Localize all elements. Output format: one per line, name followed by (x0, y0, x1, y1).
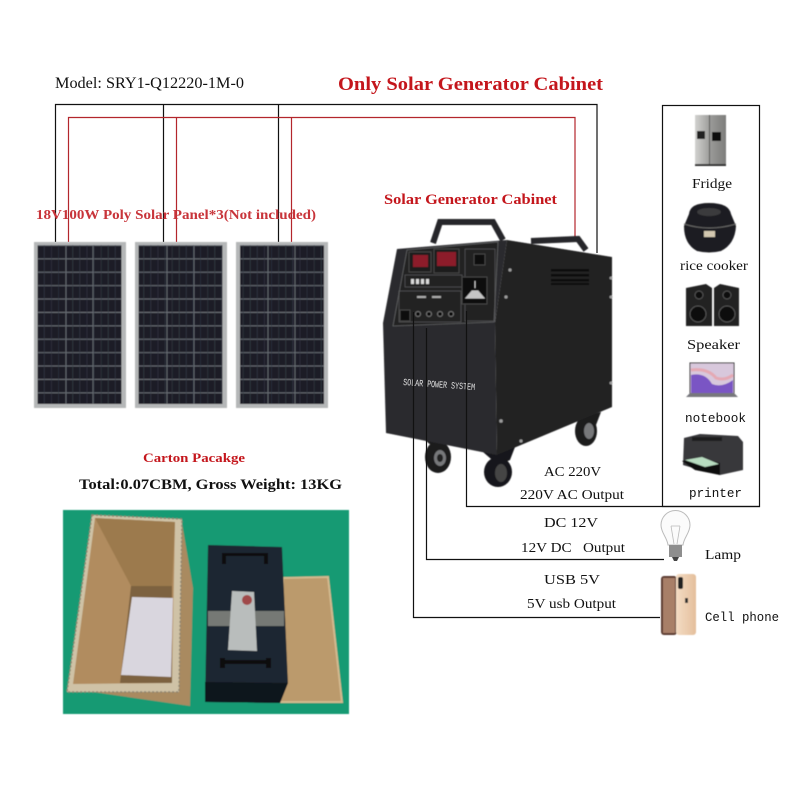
label: rice cooker: rice cooker (680, 259, 748, 274)
icon: rice cooker (684, 203, 736, 252)
label: printer: printer (689, 486, 742, 501)
panel 2 (135, 242, 227, 408)
solar generator cabinet (383, 222, 612, 487)
output label: DC: DC 12V (544, 516, 598, 531)
panel 1 (34, 242, 126, 408)
handles (433, 222, 586, 250)
indicator lights (411, 279, 429, 284)
icon: printer (682, 434, 743, 475)
icon: cell phone (661, 574, 696, 635)
carton photo (63, 510, 349, 714)
green floor (63, 510, 349, 714)
screws (499, 268, 612, 443)
output label: AC: AC 220V (544, 465, 601, 480)
output label: USB: 5V usb Output (527, 597, 616, 612)
label: fridge: Fridge (692, 177, 732, 192)
power switch (474, 254, 485, 265)
output label: AC: 220V AC Output (520, 488, 624, 503)
output label: USB (527, 573, 616, 612)
output label: DC: 12V DC Output (521, 541, 625, 556)
digital meters (409, 249, 459, 273)
icon: notebook (686, 363, 738, 397)
front face (383, 240, 507, 455)
label: cell phone: Cell phone (705, 610, 779, 625)
label: lamp: Lamp (705, 548, 741, 563)
open carton (67, 515, 193, 706)
label: speaker: Speaker (687, 338, 740, 353)
boxed cabinet (205, 545, 288, 703)
cabinet label: SOLAR POWER SYSTEM (403, 377, 476, 393)
side face (495, 240, 612, 455)
carton specs: Total:0.07CBM, Gross Weight: 13KG (79, 477, 342, 493)
vent (551, 269, 589, 285)
carton heading: Carton Pacakge (143, 450, 245, 465)
label: notebook: notebook (685, 411, 746, 426)
taped accessory bag (208, 611, 284, 626)
solar panel wiring: black (56, 104, 597, 253)
solar panel wiring: red (68, 118, 575, 242)
AC socket (462, 277, 487, 304)
output label: AC (520, 465, 624, 503)
output label: DC (521, 516, 625, 556)
panel 3 (236, 242, 328, 408)
wheels (420, 412, 601, 487)
control panel (393, 242, 498, 326)
icon: lamp (661, 511, 690, 561)
carton lid (280, 577, 342, 702)
DC outlets (416, 312, 454, 316)
icon: fridge (695, 115, 726, 166)
cabinet caption: Solar Generator Cabinet (384, 192, 557, 208)
output label: USB: USB 5V (544, 573, 600, 588)
icon: speakers (686, 284, 739, 326)
model label: Model: SRY1-Q12220-1M-0 (55, 75, 244, 92)
output wiring (414, 311, 760, 618)
solar panel caption: 18V100W Poly Solar Panel*3(Not included) (36, 208, 316, 223)
appliance box (662, 106, 760, 506)
battery switch (400, 310, 410, 321)
instruction sheet (121, 597, 173, 677)
solar panels (34, 242, 328, 408)
USB ports (417, 296, 441, 298)
title: Only Solar Generator Cabinet (338, 74, 604, 95)
